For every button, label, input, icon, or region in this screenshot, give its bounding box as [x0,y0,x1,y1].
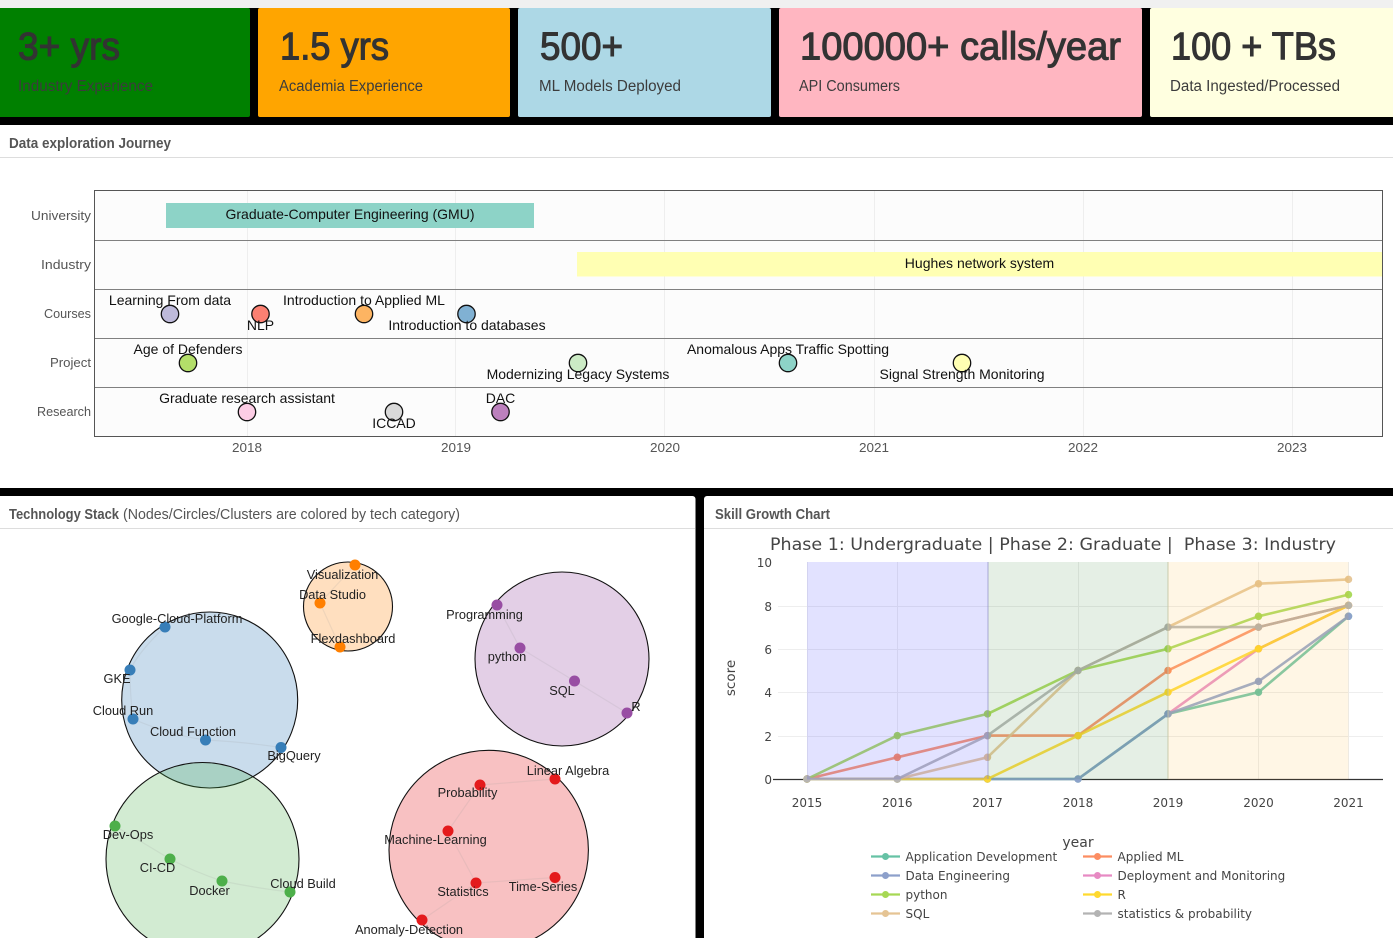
y axis labels: 4 [764,686,772,700]
cluster: programming: SQL [549,683,575,698]
KPI card: ML models deployed: 500+ [540,26,623,68]
category axis labels: Courses [44,306,91,321]
phase band: industry [1168,562,1348,780]
y axis labels: 10 [757,556,772,570]
cluster: visualization: Visualization [307,567,378,582]
x axis title: year [1062,835,1094,851]
KPI card: industry experience: 3+ yrs [18,26,120,68]
legend: SQL [906,907,930,921]
legend: Applied ML [1118,850,1184,864]
series: applied ML [807,605,1348,779]
series: statistics and probability [807,605,1348,779]
year axis labels: 2022 [1068,440,1098,455]
x axis labels: 2019 [1153,796,1183,810]
series: data engineering [807,616,1348,779]
category axis labels [31,208,92,419]
event points: projects [134,341,1044,382]
x axis labels: 2021 [1333,796,1364,810]
y axis labels: 2 [764,730,772,744]
cluster: devops: CI-CD [140,860,175,875]
legend [871,850,1285,921]
event points: projects: Modernizing Legacy Systems [487,366,669,382]
x axis labels: 2017 [972,796,1003,810]
cluster: machine learning and statistics: Linear Algebra [527,763,610,778]
event points: research: Graduate research assistant [159,390,335,406]
legend: statistics & probability [1118,907,1252,921]
cluster: machine learning and statistics: Anomaly-Detection [355,922,463,937]
x axis labels [792,796,1364,810]
cluster: machine learning and statistics: Probability [438,785,498,800]
event points: research: ICCAD [372,415,416,431]
year axis labels: 2019 [441,440,471,455]
cluster: machine learning and statistics: Statistics [437,884,489,899]
cluster: cloud: Google-Cloud-Platform [112,611,242,626]
cluster: programming [446,572,649,746]
x axis labels: 2015 [792,796,822,810]
heading: technology stack: Technology Stack [9,507,120,523]
x axis labels: 2016 [882,796,913,810]
y axis labels: 8 [764,600,772,614]
timeline chart [31,190,1382,455]
cluster: programming: R [631,699,641,714]
year axis labels: 2018 [232,440,262,455]
cluster: cloud: GKE [103,671,131,686]
KPI card: industry experience: Industry Experience [18,78,153,95]
cluster: programming: Programming [446,607,523,622]
event points: courses [109,292,546,333]
phase band: undergraduate [807,562,988,780]
legend: Data Engineering [906,869,1010,883]
panel: skill growth chart [704,496,1393,938]
legend: R [1118,888,1126,902]
bar: graduate computer engineering [166,203,534,228]
category axis labels: Project [50,355,91,370]
y axis title: score [723,660,739,696]
cluster: cloud: BigQuery [267,748,321,763]
event points: projects: Signal Strength Monitoring [880,366,1044,382]
phase band: graduate [988,562,1168,780]
event points: courses: Learning From data [109,292,231,308]
x axis labels: 2020 [1243,796,1274,810]
KPI card: academia experience: Academia Experience [279,78,423,95]
series: SQL [807,579,1348,779]
event points: projects: Age of Defenders [134,341,242,357]
cluster: devops: Dev-Ops [103,827,153,842]
cluster: visualization [299,560,395,652]
cluster: visualization: Data Studio [299,587,366,602]
year axis labels: 2023 [1277,440,1307,455]
y axis labels: 6 [764,643,772,657]
year axis labels: 2021 [859,440,889,455]
legend: python [906,888,947,902]
event points: research: DAC [486,390,515,406]
category axis labels: University [31,208,92,223]
KPI card: API consumers [779,8,1142,117]
chart title: phases: Phase 1: Undergraduate | Phase 2: Graduate | Phase 3: Industry [770,535,1336,555]
category axis labels: Research [37,404,91,419]
KPI card: API consumers: 100000+ calls/year [800,26,1121,68]
event points: courses: Introduction to databases [388,317,546,333]
KPI card: API consumers: API Consumers [799,78,900,95]
KPI card: data ingested: 100 + TBs [1171,26,1336,68]
legend: Deployment and Monitoring [1118,869,1285,883]
cluster: devops: Docker [189,883,230,898]
event points: courses: Introduction to Applied ML [283,292,445,308]
x axis labels: 2018 [1063,796,1093,810]
bar: hughes network system [577,252,1382,276]
event points: projects: Anomalous Apps Traffic Spotting [687,341,889,357]
series: python [807,595,1348,779]
KPI card: data ingested: Data Ingested/Processed [1170,78,1340,95]
KPI card: academia experience [258,8,510,117]
bar: graduate computer engineering: Graduate-Computer Engineering (GMU) [226,206,474,222]
cluster: cloud: Cloud Run [93,703,153,718]
cluster: machine learning and statistics: Machine-Learning [384,832,487,847]
heading: skill growth chart: Skill Growth Chart [715,507,830,523]
cluster: machine learning and statistics: Time-Series [509,879,577,894]
legend: Application Development [906,850,1057,864]
event points: courses: NLP [247,317,274,333]
cluster: machine learning and statistics [355,750,610,938]
panel: technology stack [0,496,696,938]
line chart [723,556,1383,851]
KPI card: ML models deployed [518,8,771,117]
cluster: cloud [93,611,321,788]
cluster: programming: python [488,649,526,664]
cluster: cloud: Cloud Function [150,724,236,739]
category axis labels: Industry [41,257,92,272]
KPI card: ML models deployed: ML Models Deployed [539,78,681,95]
heading: data exploration journey: Data exploration Journey [9,136,171,152]
KPI card: industry experience [0,8,250,117]
cluster: visualization: Flexdashboard [311,631,395,646]
cluster: devops [103,762,336,938]
event points: research [159,390,515,431]
heading note: (Nodes/Circles/Clusters are colored by tech category) [123,507,460,523]
KPI card: data ingested [1150,8,1393,117]
year axis labels [232,440,1307,455]
y axis labels [757,556,772,787]
cluster: devops: Cloud Build [270,876,336,891]
bar: hughes network system: Hughes network system [905,255,1054,271]
panel: data exploration journey [0,125,1393,488]
series: R [807,605,1348,779]
series: deployment and monitoring [1168,605,1348,714]
KPI card: academia experience: 1.5 yrs [280,26,389,68]
series: application development [807,616,1348,779]
y axis labels: 0 [764,773,772,787]
year axis labels: 2020 [650,440,680,455]
